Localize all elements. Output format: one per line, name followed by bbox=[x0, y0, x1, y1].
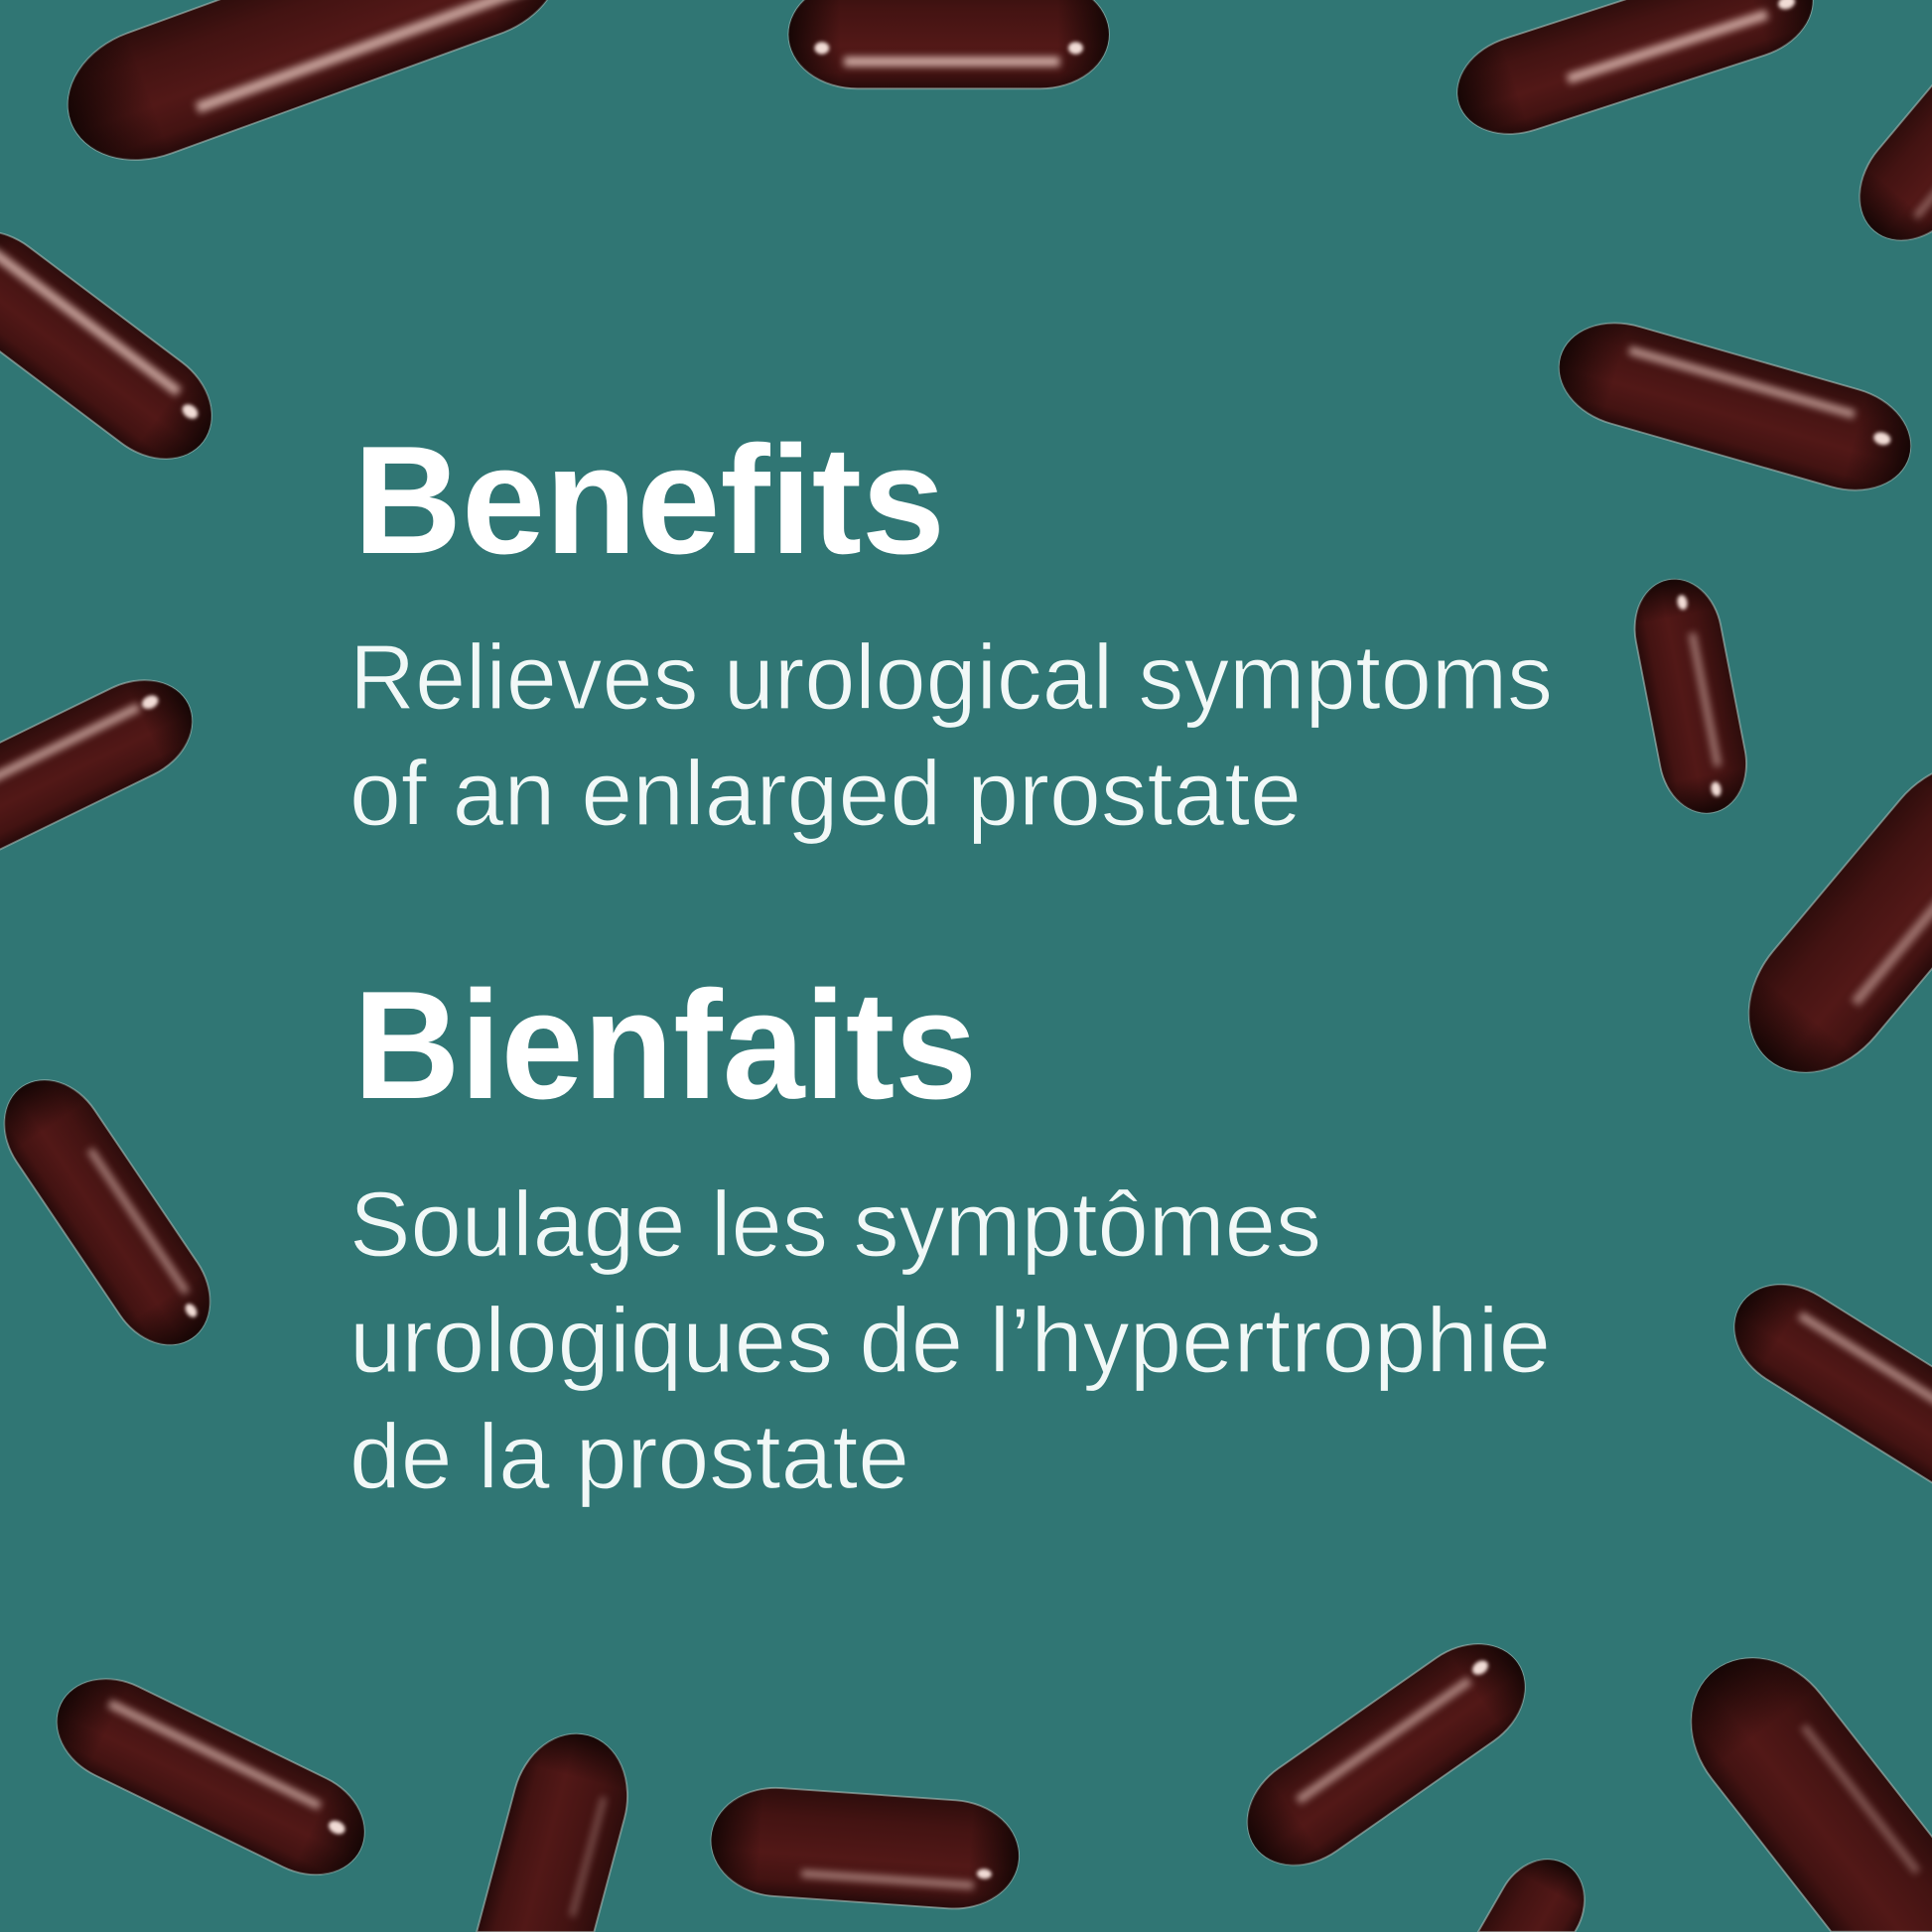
capsule right lower bbox=[1715, 1263, 1932, 1517]
capsule top right corner bbox=[1837, 0, 1932, 262]
body: French benefit text: de la prostate bbox=[349, 1405, 909, 1508]
capsule bottom far left bbox=[40, 1660, 382, 1894]
capsule bottom centre bbox=[708, 1783, 1023, 1913]
body: English benefit text bbox=[349, 625, 1553, 845]
capsule left upper bbox=[0, 208, 233, 482]
capsule top centre bbox=[788, 0, 1109, 88]
body: French benefit text bbox=[349, 1173, 1551, 1508]
capsule right small bbox=[1625, 572, 1755, 820]
capsule left middle bbox=[0, 661, 209, 880]
capsule bottom right bbox=[1226, 1621, 1547, 1888]
capsule top left bbox=[49, 0, 579, 182]
text: French benefits bbox=[349, 959, 1551, 1508]
body: French benefit text: urologiques de l’hypertrophie bbox=[349, 1289, 1551, 1392]
capsule bottom right small bbox=[1478, 1844, 1601, 1932]
body: French benefit text: Soulage les symptômes bbox=[349, 1173, 1321, 1276]
body: English benefit text: of an enlarged prostate bbox=[349, 742, 1302, 845]
capsule bottom right corner bbox=[1660, 1628, 1932, 1932]
capsule left lower bbox=[0, 1060, 230, 1364]
capsule right upper bbox=[1547, 308, 1923, 505]
capsule top right bbox=[1445, 0, 1826, 150]
capsule bottom left bbox=[477, 1721, 642, 1932]
heading: Bienfaits: Bienfaits bbox=[353, 959, 977, 1131]
text: English benefits bbox=[349, 414, 1553, 845]
capsule right middle bbox=[1718, 734, 1932, 1102]
heading: Benefits: Benefits bbox=[353, 414, 945, 586]
body: English benefit text: Relieves urological symptoms bbox=[349, 625, 1553, 729]
